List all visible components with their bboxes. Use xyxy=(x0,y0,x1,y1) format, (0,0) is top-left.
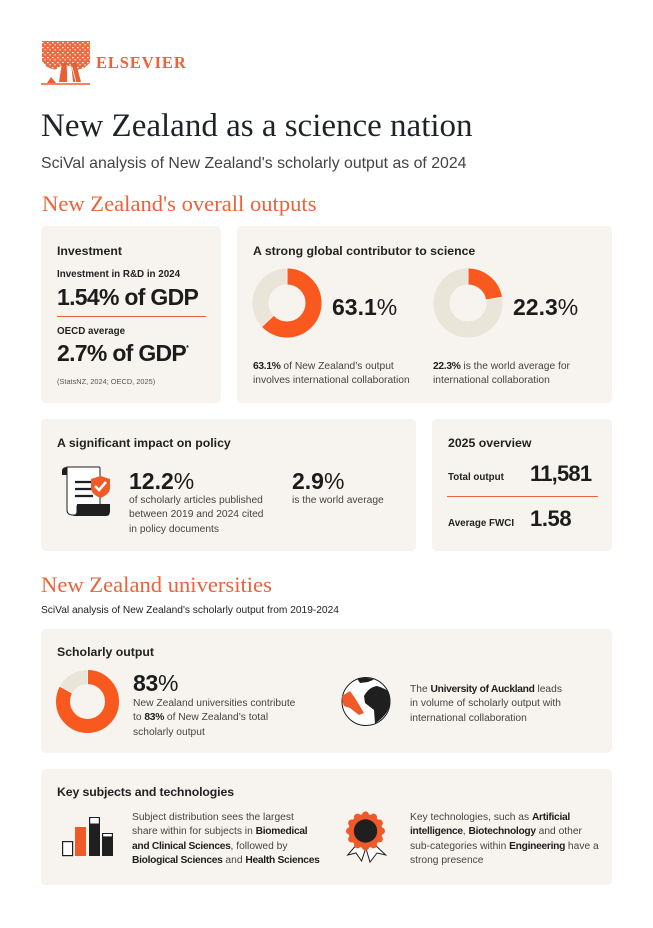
icon: rosette xyxy=(346,812,388,863)
label: average FWCI: Average FWCI xyxy=(448,518,514,529)
text: NZ collaboration xyxy=(253,361,410,386)
panel heading: Key subjects and technologies xyxy=(57,785,234,799)
logo wordmark: ELSEVIER xyxy=(96,53,187,72)
text: NZ collaboration: 63.1% of New Zealand’s output xyxy=(253,361,394,372)
panel heading: Investment xyxy=(57,244,122,258)
chart: donut 22.3% xyxy=(434,268,502,338)
icon: Elsevier tree xyxy=(41,41,90,85)
panel: scholarly output xyxy=(41,629,612,753)
subheading: universities: SciVal analysis of New Zealand's scholarly output from 2019-2024 xyxy=(41,605,339,616)
text: University of Auckland xyxy=(410,684,562,724)
text: policy citations: of scholarly articles published xyxy=(129,495,263,506)
panel heading: 2025 overview xyxy=(448,436,531,450)
text: subject distribution: share within for subjects in Biomedical xyxy=(132,826,307,837)
panel: 2025 overview xyxy=(432,419,612,551)
panel heading: Scholarly output xyxy=(57,645,154,659)
text: key technologies: strong presence xyxy=(410,855,484,866)
logo: Elsevier xyxy=(41,41,187,85)
value: 83%: 83% xyxy=(133,670,178,696)
text: universities contribution: New Zealand universities contribute xyxy=(133,698,295,709)
text: University of Auckland: The University of Auckland leads xyxy=(410,684,562,695)
text: universities contribution: scholarly output xyxy=(133,727,205,738)
text: University of Auckland: international collaboration xyxy=(410,713,527,724)
text: policy citations: between 2019 and 2024 cited xyxy=(129,509,264,520)
text: key technologies xyxy=(410,812,599,866)
text: subject distribution: Biological Sciences and Health Sciences xyxy=(132,855,320,866)
panel heading: A strong global contributor to science xyxy=(253,244,475,258)
value: 11,581: 11,581 xyxy=(530,461,591,486)
text: NZ collaboration: involves international collaboration xyxy=(253,375,410,386)
text: policy citations: in policy documents xyxy=(129,524,219,535)
text: subject distribution xyxy=(132,812,320,866)
text: universities contribution xyxy=(133,698,295,738)
chart: donut 83% xyxy=(56,670,119,733)
heading: overall outputs: New Zealand's overall outputs xyxy=(42,191,316,216)
value: 12.2%: 12.2% xyxy=(129,468,194,494)
heading: universities: New Zealand universities xyxy=(41,572,272,597)
text: University of Auckland: in volume of scholarly output with xyxy=(410,698,561,709)
icon: policy document with shield xyxy=(62,466,110,516)
label: total output: Total output xyxy=(448,472,504,483)
label: OECD average: OECD average xyxy=(57,326,125,337)
text: world average: 22.3% is the world average for xyxy=(433,361,570,372)
panel heading: A significant impact on policy xyxy=(57,436,231,450)
label: R&D investment: Investment in R&D in 2024 xyxy=(57,269,180,280)
text: policy citations xyxy=(129,495,264,535)
value: 2.7% of GDP: 2.7% of GDP* xyxy=(57,340,188,366)
text: key technologies: intelligence, Biotechnology and other xyxy=(410,826,582,837)
text: key technologies: Key technologies, such as Artificial xyxy=(410,812,570,823)
icon: bar chart xyxy=(62,817,113,856)
value: 2.9%: 2.9% xyxy=(292,468,344,494)
panel: global contributor xyxy=(237,226,612,403)
text: world average: international collaboration xyxy=(433,375,550,386)
chart: donut 63.1% xyxy=(252,268,322,338)
text: key technologies: sub-categories within Engineering have a xyxy=(410,841,599,852)
panel: impact on policy xyxy=(41,419,416,551)
text: universities contribution: to 83% of New Zealand’s total xyxy=(133,712,268,723)
panel: investment xyxy=(41,226,221,403)
value: 22.3%: 22.3% xyxy=(513,294,578,320)
panel: key subjects and technologies xyxy=(41,769,612,885)
text: subject distribution: Subject distribution sees the largest xyxy=(132,812,294,823)
source note: (StatsNZ, 2024; OECD, 2025) xyxy=(57,377,155,386)
value: 1.58: 1.58 xyxy=(530,506,571,531)
text: world average xyxy=(433,361,570,386)
value: 63.1%: 63.1% xyxy=(332,294,397,320)
subtitle: SciVal analysis of New Zealand's scholarly output as of 2024 xyxy=(41,155,466,172)
title: New Zealand as a science nation xyxy=(41,108,473,144)
value: 1.54% of GDP: 1.54% of GDP xyxy=(57,284,198,310)
text: subject distribution: and Clinical Sciences, followed by xyxy=(132,841,288,852)
icon: globe xyxy=(342,677,390,726)
text: world average: is the world average xyxy=(292,495,384,506)
